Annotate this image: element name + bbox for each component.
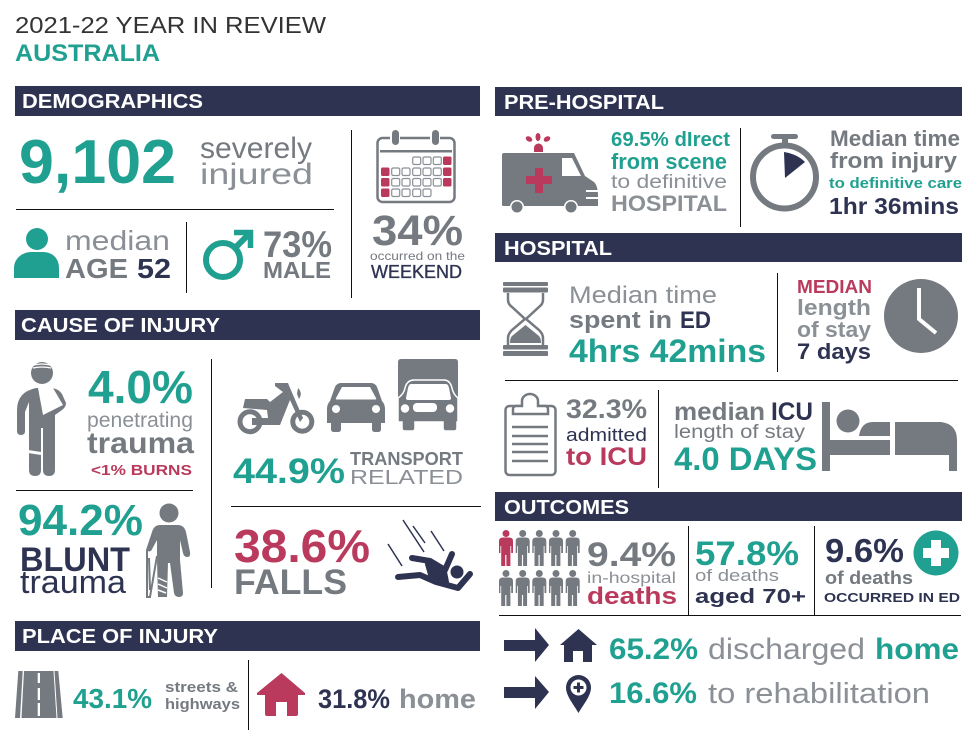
stat: discharged home: [609, 633, 959, 666]
icon: medical cross: [914, 530, 958, 576]
heading: demographics: [15, 86, 480, 116]
stat: male: 73%: [263, 224, 332, 265]
stat: in-hospital deaths: 9.4%: [587, 536, 676, 574]
stat: transport related: 44.9%: [233, 452, 345, 491]
stat: discharged home: home: [875, 633, 959, 666]
stat: admitted to ICU: admitted: [566, 425, 647, 445]
stat: deaths in ED: 9.6%: [825, 532, 904, 569]
stat: male: MALE: [263, 257, 331, 283]
stat: direct from scene: HOSPITAL: [611, 191, 727, 216]
stat: streets and highways: streets &: [165, 679, 238, 696]
stat: admitted to ICU: to ICU: [566, 443, 647, 471]
stat: severely injured: severely: [200, 132, 312, 165]
heading: pre-hospital: [495, 87, 962, 116]
stat: direct from scene: to definitive: [611, 172, 727, 193]
stat: deaths in ED: OCCURRED IN ED: [824, 590, 960, 605]
icon: house: [257, 673, 305, 716]
stat: median age: 52: [137, 253, 171, 284]
stat: weekend: 34%: [372, 207, 463, 255]
stat: weekend: occurred on the: [370, 249, 465, 263]
stat: ICU length of stay: length of stay: [674, 422, 806, 443]
heading: hospital: [495, 233, 962, 262]
stat: median time injury: from injury: [830, 148, 958, 173]
stat: discharged home: discharged: [708, 633, 865, 666]
stat: direct from scene: 69.5% dIrect: [611, 129, 730, 151]
stat: median time in ED: ED: [680, 307, 711, 334]
stat: ICU length of stay: [674, 398, 817, 477]
panel: cause of injury: [15, 310, 481, 602]
stat: median time in ED: Median time: [569, 282, 717, 309]
heading: outcomes: [495, 492, 962, 521]
stat: deaths aged 70+: 57.8%: [695, 535, 799, 573]
arrow: discharged: [504, 628, 549, 662]
heading: place of injury: [15, 621, 480, 651]
stat: penetrating trauma: 4.0%: [88, 361, 193, 413]
icon: truck: [398, 359, 458, 431]
stat: direct from scene: [611, 129, 730, 216]
icon: clock: [884, 279, 958, 353]
stat: penetrating trauma: penetrating: [87, 409, 193, 432]
panel: hospital: [495, 233, 962, 488]
heading: cause of injury: CAUSE OF INJURY: [21, 315, 221, 337]
icon: motorcycle: [240, 383, 312, 432]
panel: pre-hospital: [495, 87, 962, 227]
stat: admitted to ICU: [566, 394, 647, 471]
stat: transport related: TRANSPORT: [350, 449, 463, 469]
heading: outcomes: OUTCOMES: [504, 497, 629, 519]
arrow: rehabilitation: [504, 676, 549, 709]
stat: ICU length of stay: median: [674, 398, 765, 426]
stat: home: 31.8%: [318, 684, 390, 714]
icon: stopwatch: [753, 134, 816, 208]
stat: median time injury: to definitive care: [829, 175, 962, 192]
stat: falls: 38.6%: [234, 520, 370, 572]
stat: deaths aged 70+: of deaths: [695, 566, 779, 585]
icon: person: [14, 228, 59, 278]
stat: transport related: [233, 449, 463, 491]
icon: falling person: [388, 520, 470, 588]
stat: median length of stay: length: [797, 295, 871, 320]
panel: outcomes: [495, 492, 962, 713]
stat: discharged home: 65.2%: [609, 633, 698, 666]
stat: streets and highways: highways: [165, 696, 240, 713]
stat: blunt trauma: 94.2%: [18, 496, 143, 545]
stat: transport related: RELATED: [350, 467, 463, 489]
stat: home: home: [399, 684, 476, 714]
stat: male: [263, 224, 332, 283]
panel: place of injury: [15, 621, 480, 730]
stat: median length of stay: of stay: [797, 317, 872, 342]
stat: admitted to ICU: 32.3%: [566, 394, 647, 424]
icon: injured person: [17, 362, 66, 476]
stat: median time injury: [829, 126, 962, 219]
stat: deaths aged 70+: [695, 535, 806, 608]
stat: median time injury: 1hr 36mins: [829, 193, 959, 219]
icon: hospital bed: [822, 402, 957, 471]
stat: in-hospital deaths: in-hospital: [587, 570, 676, 587]
icon: male symbol: [206, 232, 250, 277]
icon: person with crutch: [146, 504, 190, 597]
stat: median time in ED: spent in: [569, 307, 672, 334]
icon: home: [560, 629, 597, 662]
icon: ten people pictogram: [499, 530, 580, 606]
heading: place of injury: PLACE OF INJURY: [22, 626, 219, 648]
stat: penetrating trauma: trauma: [87, 427, 194, 460]
stat: in-hospital deaths: deaths: [587, 583, 677, 610]
stat: penetrating trauma: <1% BURNS: [91, 462, 192, 479]
stat: median time in ED: 4hrs 42mins: [569, 333, 766, 369]
stat: severely injured: injured: [200, 158, 313, 191]
icon: car: [327, 383, 385, 432]
stat: median age: [65, 225, 171, 284]
stat: median age: median: [65, 225, 170, 256]
icon: ambulance: [502, 133, 599, 214]
stat: median time injury: Median time: [830, 126, 960, 151]
stat: median length of stay: [797, 277, 872, 364]
stat: median time in ED: [569, 282, 766, 369]
stat: streets and highways: 43.1%: [73, 683, 152, 714]
stat: ICU length of stay: ICU: [771, 398, 813, 426]
icon: calendar: [378, 129, 454, 202]
stat: falls: FALLS: [234, 563, 347, 602]
stat: median length of stay: 7 days: [797, 339, 871, 364]
icon: hourglass: [503, 282, 548, 356]
stat: streets and highways: [73, 679, 240, 714]
stat: severely injured: [19, 128, 313, 197]
stat: deaths in ED: [824, 532, 960, 605]
stat: blunt trauma: trauma: [20, 564, 126, 600]
stat: ICU length of stay: 4.0 DAYS: [674, 441, 817, 477]
stat: to rehabilitation: [609, 677, 930, 710]
title: [15, 12, 326, 67]
title: 2021-22 YEAR IN REVIEW: [15, 12, 326, 38]
stat: blunt trauma: BLUNT: [20, 541, 130, 579]
stat: severely injured: 9,102: [19, 128, 176, 197]
stat: to rehabilitation: to rehabilitation: [708, 678, 930, 710]
stat: weekend: [370, 207, 465, 282]
heading: demographics: DEMOGRAPHICS: [22, 91, 203, 113]
icon: clipboard: [506, 394, 556, 475]
stat: penetrating trauma: [87, 361, 194, 479]
stat: median age: AGE: [65, 253, 128, 284]
stat: weekend: WEEKEND: [371, 262, 462, 282]
stat: home: [318, 684, 476, 714]
stat: in-hospital deaths: [587, 536, 677, 610]
stat: to rehabilitation: 16.6%: [609, 677, 697, 710]
stat: deaths in ED: of deaths: [825, 568, 913, 588]
stat: falls: [234, 520, 370, 602]
heading: cause of injury: [15, 310, 480, 340]
icon: road: [15, 671, 63, 718]
stat: direct from scene: from scene: [611, 149, 727, 174]
icon: location pin: [566, 675, 591, 713]
title: AUSTRALIA: [15, 40, 160, 67]
stat: deaths aged 70+: aged 70+: [695, 586, 806, 608]
heading: hospital: HOSPITAL: [504, 238, 612, 260]
stat: median length of stay: MEDIAN: [797, 277, 872, 297]
stat: blunt trauma: [18, 496, 143, 600]
panel: demographics: [14, 86, 480, 298]
heading: pre-hospital: PRE-HOSPITAL: [504, 92, 664, 114]
